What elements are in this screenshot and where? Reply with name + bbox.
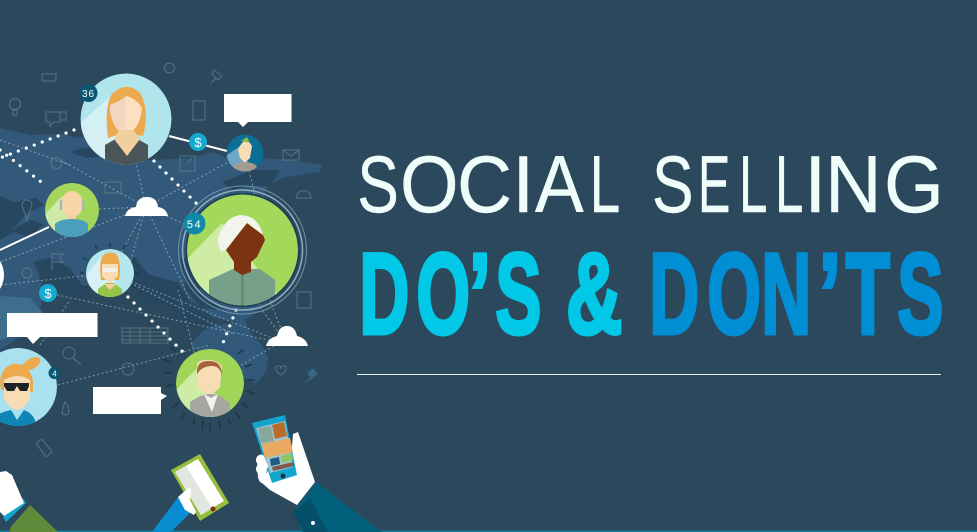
- white connector lines: [0, 136, 227, 250]
- title: Social Selling: E: [698, 140, 730, 230]
- badge: 4: 4: [52, 370, 57, 378]
- title: Don'ts: D: [649, 230, 699, 359]
- title: Social Selling: I: [512, 140, 535, 230]
- avatar: big person 54: [178, 186, 306, 314]
- badge: 54: [184, 212, 206, 234]
- title: Don'ts: O: [707, 230, 761, 359]
- dollar badge: top: [189, 133, 207, 151]
- left edge avatar: [0, 249, 4, 301]
- title: Do's: [359, 229, 622, 359]
- avatar: man in suit: [163, 347, 255, 431]
- avatar: small woman with glasses: [80, 243, 140, 297]
- avatar: woman with sunglasses: [0, 348, 57, 430]
- title: Don'ts: [649, 230, 943, 359]
- dotted connection paths: [0, 130, 236, 352]
- title: Do's: S: [495, 230, 541, 359]
- dollar badge: left: [39, 284, 57, 302]
- title: Social Selling: S: [652, 140, 694, 230]
- badge: 36: [80, 84, 98, 102]
- avatar: small man top right: [226, 134, 264, 174]
- title: Social Selling: O: [400, 138, 459, 230]
- title: Social Selling: I: [804, 140, 827, 230]
- title: Social Selling: A: [535, 139, 584, 230]
- hand with green sleeve: [0, 471, 58, 532]
- divider line: [357, 374, 941, 375]
- network dashed lines: [0, 119, 288, 385]
- badge: 54: 54: [187, 219, 202, 231]
- title: Don'ts: S: [897, 230, 943, 359]
- hand with blue phone: [252, 415, 382, 532]
- title: Social Selling: L: [739, 140, 767, 230]
- title: Social Selling: [357, 138, 944, 230]
- world map: [0, 128, 322, 392]
- cloud: centre: [125, 197, 168, 216]
- title: Do's: D: [359, 230, 409, 359]
- hand with green phone: [152, 454, 229, 532]
- title: Don'ts: N: [761, 230, 811, 359]
- cloud: lower right: [266, 326, 308, 346]
- title: Do's: &: [566, 229, 622, 358]
- radiating rays: [163, 347, 255, 431]
- title: Social Selling: L: [775, 140, 803, 230]
- title: Do's: ’: [469, 230, 491, 359]
- dollar badge: left: $: [44, 286, 52, 301]
- speech bubble: centre bottom: [93, 387, 167, 414]
- speech bubble: top right: [224, 94, 292, 127]
- avatar: green headset man: [45, 183, 99, 240]
- title: Social Selling: L: [590, 138, 620, 230]
- bottom edge strip: [0, 530, 977, 532]
- dollar badge: top: $: [194, 135, 202, 150]
- title: Do's: O: [416, 230, 470, 359]
- faint outline icons: [10, 63, 311, 457]
- illustration: world map network: [0, 63, 382, 532]
- title: Don'ts: T: [846, 231, 890, 359]
- title: Social Selling: N: [825, 139, 882, 229]
- badge: 4: [48, 367, 60, 379]
- badge: 36: 36: [82, 89, 95, 100]
- title: Social Selling: G: [884, 138, 944, 229]
- title: Social Selling: S: [357, 140, 399, 230]
- title: Social Selling: C: [457, 139, 512, 230]
- avatar: woman 36: [80, 74, 172, 170]
- speech bubble: left: [7, 313, 98, 344]
- title: Don'ts: ’: [819, 230, 841, 359]
